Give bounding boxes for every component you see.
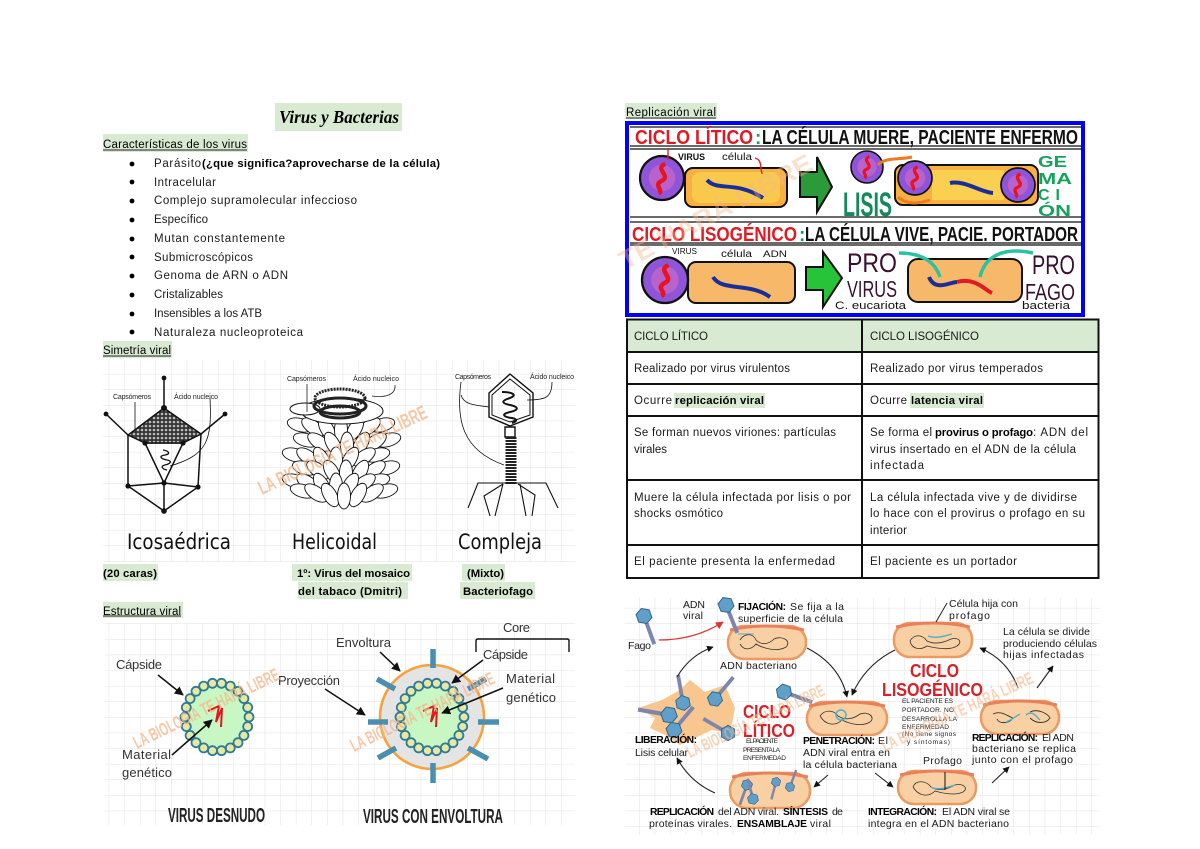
- label: proyección: Proyección: [278, 673, 340, 688]
- watermark: TE HARÁ LIBRE: [614, 148, 818, 275]
- icon: virus desnudo: [180, 679, 254, 755]
- icon: fago: [635, 606, 661, 647]
- label: replicación lítico: de: [832, 806, 843, 818]
- row: célula: shocks osmótico: [634, 508, 723, 520]
- row: formación: : ADN del: [1033, 427, 1088, 439]
- cell: penetración: [807, 702, 887, 735]
- label: material genético envoltura: [442, 671, 556, 713]
- label: replicación lítico: viral: [810, 818, 831, 830]
- label: material genético desnudo: Material: [122, 747, 171, 762]
- list: características: Específico: [154, 214, 208, 226]
- caption: virus del mosaico del tabaco: 1º: Virus del mosaico: [297, 568, 410, 580]
- label: ciclo lisogénico: (No tiene signos: [902, 731, 957, 738]
- label: compleja: Compleja: [458, 530, 542, 554]
- list: características: Parásito: [154, 158, 201, 170]
- cell: fijación: [728, 626, 806, 659]
- label: ácido nucleico compleja: Ácido nucleico: [530, 372, 574, 381]
- row: célula: [634, 492, 1085, 537]
- label: replicación lisogénico: [971, 731, 1076, 766]
- caption: virus del mosaico del tabaco: del tabaco (Dmitri): [298, 586, 402, 598]
- row: célula: La célula infectada vive y de dividirse: [870, 492, 1077, 504]
- heading: estructura viral: Estructura viral: [103, 606, 181, 618]
- list: características: [130, 158, 440, 339]
- label: profago: [1022, 250, 1075, 312]
- panel: simetría viral diagram: [103, 360, 575, 562]
- label: profago: PRO: [1032, 250, 1075, 280]
- label: core bracket: [476, 620, 569, 652]
- label: célula hija con profago: [936, 598, 1018, 622]
- label: replicación lítico: ENSAMBLAJE: [737, 819, 807, 830]
- row: célula: lo hace con el provirus o profago en su: [870, 508, 1085, 520]
- label: fijación: Se fija a la: [790, 601, 844, 613]
- label: cápside envoltura: [452, 647, 528, 683]
- label: replicación lítico: REPLICACIÓN: [650, 805, 714, 818]
- label: gemación: CI: [1038, 187, 1060, 204]
- row: ocurre: Ocurre: [870, 395, 907, 407]
- caption: mixto bacteriofago: Bacteriofago: [463, 586, 533, 598]
- label: material genético envoltura: genético: [506, 690, 556, 705]
- label: ácido nucleico helicoidal: Ácido nucleico: [353, 374, 399, 383]
- label: profago: FAGO: [1025, 279, 1075, 305]
- label: ADN viral: [683, 599, 705, 622]
- heading: características de los virus: Características de los virus: [103, 139, 247, 151]
- list: características: Genoma de ARN o ADN: [154, 270, 288, 282]
- label: replicación lisogénico: junto con el profago: [971, 754, 1073, 766]
- label: material genético desnudo: genético: [122, 765, 172, 780]
- row: ocurre: Ocurre: [634, 395, 672, 407]
- label: ciclo lítico: [743, 702, 795, 762]
- label: liberación: Lisis celular: [635, 747, 688, 759]
- label: integración: [868, 805, 1010, 830]
- label: penetración: El: [878, 735, 888, 747]
- heading: ciclo lítico: CICLO LÍTICO: [635, 126, 753, 149]
- label: replicación lítico: del ADN viral.: [718, 806, 779, 818]
- label: ciclo lisogénico: PORTADOR. NO: [902, 707, 954, 714]
- label: profago: Profago: [923, 755, 962, 767]
- table header: CICLO LÍTICO: [634, 330, 708, 343]
- arrow: lisogénico: [806, 252, 842, 307]
- label: ciclo lisogénico: [882, 661, 983, 746]
- label: material genético desnudo: [122, 720, 212, 780]
- row: formación: virales: [634, 444, 667, 456]
- label: provirus: C. eucariota: [835, 300, 907, 312]
- label: provirus: [835, 248, 907, 312]
- heading: ciclo lítico: [635, 126, 1078, 149]
- heading: ciclo lítico: LA CÉLULA MUERE, PACIENTE ENFERMO: [762, 126, 1078, 149]
- icon: virus on cell (lisogénico): célula: [721, 249, 753, 260]
- label: cápside desnudo: [116, 657, 183, 695]
- row: paciente: El paciente presenta la enfermedad: [634, 556, 835, 568]
- label: fijación: [738, 600, 844, 625]
- label: la célula se divide: [1003, 626, 1097, 661]
- label: provirus: VIRUS: [847, 276, 897, 302]
- label: ciclo lisogénico: ENFERMEDAD: [902, 724, 949, 731]
- watermark: LA BIOLOGÍA TE HARÁ LIBRE: [684, 681, 828, 762]
- icon: virus on cell (lisogénico): [642, 247, 795, 303]
- list: características: Insensibles a los ATB: [154, 308, 262, 320]
- label: helicoidal: Helicoidal: [292, 530, 377, 554]
- label: penetración: ADN viral entra en: [803, 747, 890, 759]
- label: integración: El ADN viral se: [942, 806, 1010, 818]
- icon: virus con envoltura: [368, 649, 499, 783]
- heading: simetría viral: [103, 341, 172, 358]
- label: ciclo lisogénico: DESARROLLA LA: [902, 716, 958, 723]
- cell: replicación lisogénico: [981, 701, 1059, 734]
- label: virus desnudo: VIRUS DESNUDO: [168, 805, 265, 827]
- label: ciclo lítico: CICLO: [743, 702, 791, 722]
- heading: simetría viral: Simetría viral: [103, 345, 171, 357]
- caption: virus del mosaico del tabaco: [292, 564, 412, 599]
- label: la célula se divide: La célula se divide: [1003, 626, 1090, 638]
- icon: cell with budding viruses: [878, 157, 1038, 205]
- icon: lisis: LISIS: [843, 186, 892, 224]
- label: la célula se divide: produciendo células: [1003, 638, 1097, 650]
- table header: CICLO LISOGÉNICO: [870, 330, 979, 343]
- panel: ciclos lítico y lisogénico diagram: [625, 595, 1100, 835]
- label: célula hija con profago: Célula hija con: [949, 598, 1018, 610]
- icon: fago penetrando: [774, 683, 815, 709]
- label: replicación lisogénico: bacteriano se replica: [972, 743, 1076, 755]
- label: gemación: ÓN: [1038, 201, 1071, 220]
- label: ciclo lisogénico: EL PACIENTE ES: [902, 698, 954, 705]
- label: integración: INTEGRACIÓN:: [868, 805, 937, 818]
- label: liberación: [635, 733, 697, 759]
- table: ciclo lítico vs lisogénico: [627, 320, 1099, 578]
- label: ADN bacteriano: ADN bacteriano: [720, 660, 797, 672]
- row: paciente: El paciente es un portador: [870, 556, 1017, 568]
- heading: características de los virus: [103, 134, 248, 152]
- label: replicación lisogénico: REPLICACIÓN:: [972, 731, 1038, 744]
- label: ADN viral: ADN: [683, 599, 705, 611]
- label: ciclo lítico: ENFERMEDAD: [743, 755, 786, 762]
- title: Virus y Bacterias: [279, 107, 399, 127]
- label: ciclo lítico: LÍTICO: [743, 720, 795, 741]
- cell: lisis: [637, 673, 738, 745]
- row: formación: virus insertado en el ADN de la célula: [870, 444, 1077, 456]
- panel: ciclo lítico y lisogénico illustration: [614, 123, 1083, 315]
- list: características: Naturaleza nucleoproteica: [154, 327, 304, 339]
- label: replicación lítico: proteínas virales.: [649, 818, 732, 830]
- icon: virus on cell (lisogénico): ADN: [763, 249, 787, 259]
- label: gemación: [1038, 154, 1073, 220]
- row: virus: [634, 363, 1043, 375]
- label: fijación: superficie de la célula: [738, 613, 843, 625]
- watermark: LA BIOLOGÍA TE HARÁ LIBRE: [347, 667, 498, 756]
- icon: fago fijado: [717, 595, 744, 635]
- label: penetración: [803, 734, 897, 771]
- table header: [634, 330, 979, 343]
- caption: mixto bacteriofago: (Mixto): [467, 568, 504, 580]
- row: virus: Realizado por virus temperados: [870, 363, 1043, 375]
- row: formación: Se forma el: [870, 427, 932, 439]
- list: características: Submicroscópicos: [154, 252, 253, 264]
- icon: virus on cell (lítico): VIRUS: [678, 152, 705, 162]
- label: gemación: GE: [1038, 154, 1067, 171]
- arrows: ciclo: [677, 647, 1053, 793]
- list: características: Cristalizables: [154, 289, 223, 301]
- watermark: LA BIOLOGÍA TE HARÁ LIBRE: [879, 669, 1036, 756]
- heading: ciclo lítico: :: [755, 128, 761, 149]
- row: formación: provirus o profago: [935, 427, 1033, 439]
- label: cápside envoltura: Cápside: [483, 647, 528, 662]
- label: célula hija con profago: profago: [949, 610, 990, 622]
- list: características: Intracelular: [154, 177, 216, 189]
- icon: compleja bacteriófago: [460, 374, 558, 516]
- panel: estructura viral diagram: [105, 620, 575, 828]
- label: virus con envoltura: VIRUS CON ENVOLTURA: [363, 806, 503, 828]
- row: célula: interior: [870, 525, 907, 537]
- label: capsómeros helicoidal: Capsómeros: [287, 376, 326, 383]
- label: material genético envoltura: Material: [506, 671, 555, 686]
- row: célula: Muere la célula infectada por lisis o por: [634, 492, 851, 504]
- label: ADN viral: viral: [683, 610, 703, 622]
- label: replicación lítico: SÍNTESIS: [783, 805, 828, 818]
- list: características: Complejo supramolecular infeccioso: [154, 195, 357, 207]
- label: ciclo lisogénico: LISOGÉNICO: [882, 679, 983, 700]
- cell: hija con profago: [894, 623, 972, 657]
- list: características: Mutan constantemente: [154, 233, 285, 245]
- icon: virus on cell (lítico): célula: [722, 152, 752, 163]
- icon: virus on cell (lisogénico): VIRUS: [672, 247, 697, 256]
- row: ocurre: replicación viral: [675, 395, 764, 407]
- row: virus: Realizado por virus virulentos: [634, 363, 790, 375]
- highlight: latencia viral: [910, 393, 984, 408]
- label: replicación lítico: [649, 805, 843, 830]
- arrow: lítico: [800, 157, 832, 212]
- heading: ciclo lisogénico: LA CÉLULA VIVE, PACIE. PORTADOR: [805, 223, 1078, 246]
- label: envoltura: Envoltura: [336, 635, 392, 650]
- icon: lisis: [843, 151, 892, 224]
- heading: ciclo lisogénico: CICLO LISOGÉNICO: [632, 223, 797, 246]
- heading: replicación viral: Replicación viral: [626, 107, 716, 119]
- label: liberación: LIBERACIÓN:: [635, 733, 697, 746]
- label: capsómeros icosaédrica: Capsómeros: [113, 394, 152, 401]
- caption: 20 caras: [103, 564, 158, 581]
- label: ciclo lítico: EL PACIENTE: [746, 738, 779, 745]
- watermark: LA BIOLOGÍA TE HARÁ LIBRE: [130, 664, 283, 753]
- caption: 20 caras: (20 caras): [103, 568, 157, 580]
- label: core bracket: Core: [503, 620, 530, 635]
- row: ocurre: latencia viral: [911, 395, 983, 407]
- label: provirus: PRO: [847, 248, 897, 278]
- row: ocurre: [634, 395, 983, 407]
- icon: virus on cell (lítico): [640, 149, 787, 207]
- label: fijación: FIJACIÓN:: [738, 600, 786, 613]
- label: la célula se divide: hijas infectadas: [1003, 649, 1084, 661]
- highlight: replicación viral: [674, 393, 765, 408]
- label: envoltura: [336, 635, 400, 671]
- icon: cell with integrated DNA: [899, 251, 1033, 302]
- title: [275, 103, 402, 131]
- label: capsómeros compleja: Capsómeros: [455, 374, 492, 381]
- arrow: fago a célula: [659, 622, 723, 640]
- label: ciclo lisogénico: CICLO: [910, 661, 959, 681]
- watermark: LA BIOLOGÍA TE HARÁ LIBRE: [254, 401, 431, 500]
- row: formación: [634, 427, 1088, 472]
- cell: integración: [898, 771, 976, 804]
- label: profago: bacteria: [1022, 300, 1071, 312]
- caption: mixto bacteriofago: [460, 564, 535, 599]
- label: penetración: la célula bacteriana: [803, 759, 897, 771]
- label: ciclo lisogénico: y síntomas): [907, 739, 950, 746]
- list: características: (¿que significa?aprovecharse de la célula): [202, 158, 440, 170]
- label: proyección: [278, 673, 365, 715]
- label: integración: integra en el ADN bacteriano: [868, 818, 1009, 830]
- label: cápside desnudo: Cápside: [116, 657, 162, 672]
- label: icosaédrica: Icosaédrica: [127, 530, 231, 554]
- row: paciente: [634, 556, 1017, 568]
- label: gemación: MA: [1038, 171, 1073, 188]
- heading: ciclo lisogénico: [632, 223, 1078, 246]
- row: formación: infectada: [870, 460, 925, 472]
- label: ciclo lítico: PRESENTA LA: [743, 747, 781, 754]
- cell: replicación lítico: [730, 769, 810, 808]
- label: penetración: PENETRACIÓN:: [803, 734, 875, 747]
- label: ácido nucleico icosaédrica: Ácido nucleico: [174, 392, 218, 401]
- row: formación: Se forman nuevos viriones: partículas: [634, 427, 836, 439]
- icon: helicoidal: [281, 384, 402, 510]
- heading: ciclo lisogénico: :: [799, 225, 805, 246]
- icon: icosaédrica: [104, 376, 227, 514]
- label: replicación lisogénico: El ADN: [1042, 732, 1074, 744]
- label: fago: Fago: [628, 640, 651, 652]
